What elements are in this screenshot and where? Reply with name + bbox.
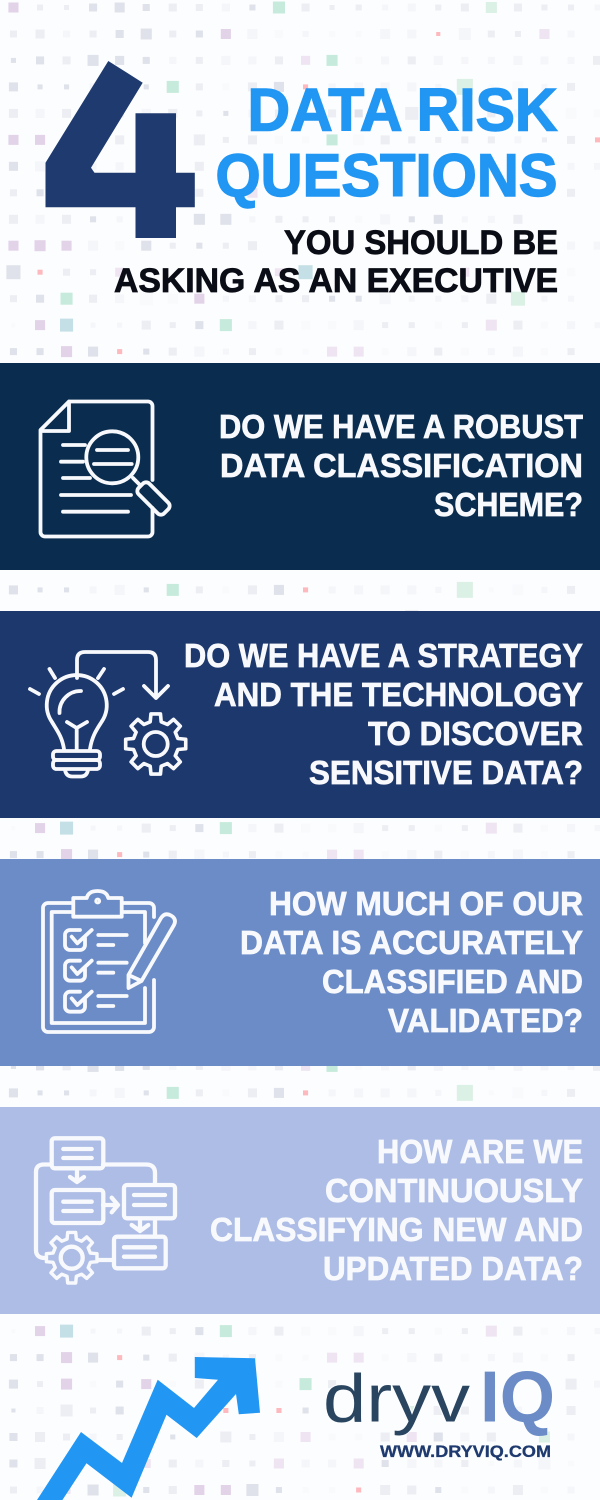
logo: dryvIQ: IQ: [480, 1358, 555, 1438]
question text 4: UPDATED DATA?: [323, 1250, 583, 1287]
subtitle: YOU SHOULD BE: [284, 224, 558, 262]
question text 1: DO WE HAVE A ROBUST: [219, 408, 583, 445]
icon: clipboard checklist with pencil: [43, 891, 175, 1032]
question text 3: HOW MUCH OF OUR: [269, 885, 583, 922]
title: [216, 76, 558, 209]
question text 3: CLASSIFIED AND: [322, 963, 583, 1000]
big numeral 4: [46, 61, 195, 238]
subtitle: [114, 224, 558, 300]
logo: dryvIQ: [323, 1358, 555, 1438]
question text 1: DATA CLASSIFICATION: [220, 447, 583, 484]
question text 2: AND THE TECHNOLOGY: [214, 676, 583, 713]
question text 4: [210, 1133, 583, 1287]
question text 1: [219, 408, 583, 523]
panel: question 2: [0, 611, 600, 818]
title: DATA RISK: [248, 76, 558, 144]
arrow: rising trend: [37, 1357, 260, 1500]
question text 3: DATA IS ACCURATELY: [240, 924, 583, 961]
question text 2: SENSITIVE DATA?: [309, 754, 583, 791]
icon: light bulb and gear: [30, 652, 186, 776]
panel: question 3: [0, 859, 600, 1066]
subtitle: ASKING AS AN EXECUTIVE: [114, 262, 558, 300]
question text 4: HOW ARE WE: [377, 1133, 583, 1170]
panel: question 4: [0, 1107, 600, 1314]
question text 4: CLASSIFYING NEW AND: [210, 1211, 583, 1248]
question text 4: CONTINUOUSLY: [325, 1172, 583, 1209]
question text 2: [184, 637, 583, 791]
question text 1: SCHEME?: [434, 486, 583, 523]
question text 3: VALIDATED?: [388, 1002, 583, 1039]
icon: process flow diagram: [36, 1138, 175, 1283]
question text 3: [240, 885, 583, 1039]
question text 2: DO WE HAVE A STRATEGY: [184, 637, 583, 674]
panel: question 1: [0, 363, 600, 570]
question text 2: TO DISCOVER: [368, 715, 583, 752]
logo: dryvIQ: dryv: [323, 1360, 470, 1436]
icon: document with magnifier: [40, 402, 172, 536]
website url: WWW.DRYVIQ.COM: [380, 1442, 551, 1461]
title: QUESTIONS: [216, 142, 558, 209]
